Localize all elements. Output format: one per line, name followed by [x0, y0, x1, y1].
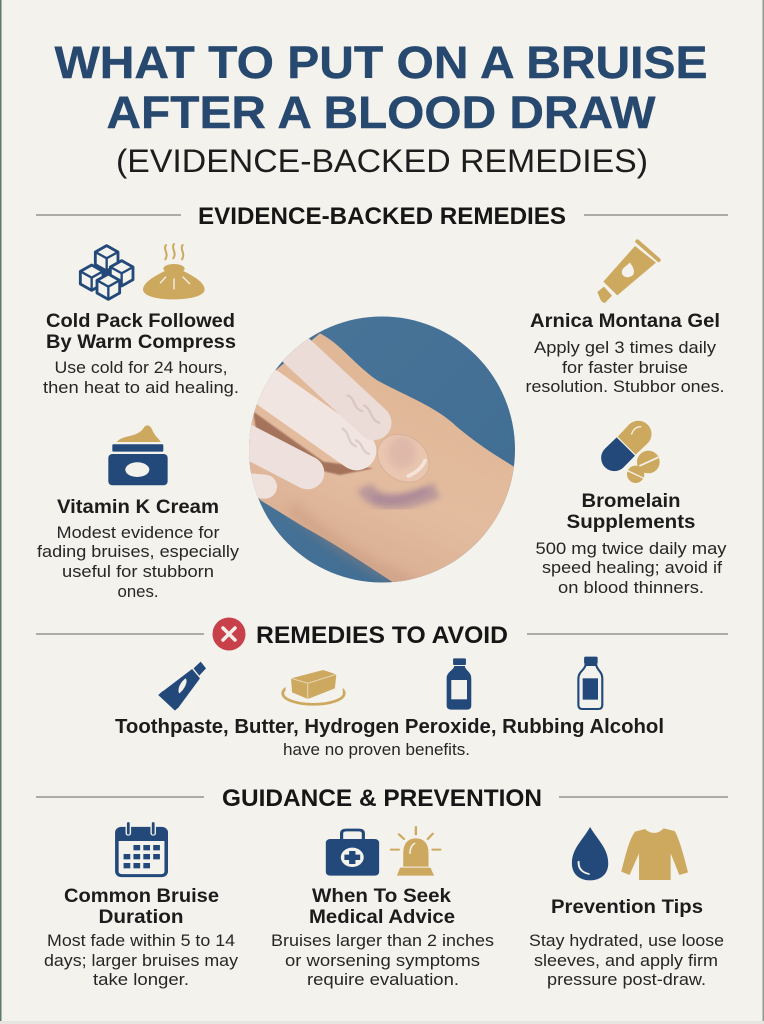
text: prevention tips: Prevention Tips: [551, 897, 703, 918]
photo: gloved fingers pressing a bandage on a bruised arm: [249, 316, 515, 582]
text: arnica montana gel: Arnica Montana Gel: [530, 311, 720, 332]
text: vitamin k cream: Modest evidence for: [56, 523, 220, 542]
text: bromelain supplements: Bromelain: [582, 491, 680, 512]
text: common bruise duration: [44, 886, 239, 989]
icon: pills: [601, 421, 660, 483]
text: when to seek medical advice: or worsening symptoms: [285, 951, 480, 970]
text: bromelain supplements: speed healing; avoid if: [542, 558, 722, 577]
bandage: [377, 434, 430, 482]
text: common bruise duration: Most fade within 5 to 14: [47, 931, 235, 950]
title: WHAT TO PUT ON A BRUISE: [54, 37, 708, 88]
text: arnica montana gel: Apply gel 3 times daily: [534, 338, 717, 357]
text: vitamin k cream: Vitamin K Cream: [57, 497, 219, 518]
text: arnica montana gel: resolution. Stubbor ones.: [526, 377, 724, 396]
title: AFTER A BLOOD DRAW: [106, 87, 656, 138]
title: (EVIDENCE-BACKED REMEDIES): [116, 143, 648, 179]
text: when to seek medical advice: Medical Advice: [309, 907, 455, 928]
text: arnica montana gel: for faster bruise: [562, 358, 688, 377]
text: cold pack followed by warm compress: Cold Pack Followed: [46, 311, 235, 332]
text: cold pack followed by warm compress: Use cold for 24 hours,: [54, 358, 228, 377]
text: when to seek medical advice: When To Seek: [312, 886, 451, 907]
text: common bruise duration: days; larger bruises may: [44, 951, 239, 970]
text: vitamin k cream: fading bruises, especially: [37, 542, 240, 561]
text: prevention tips: [529, 897, 724, 989]
bruise: [365, 487, 437, 502]
icon: calendar: [116, 823, 167, 876]
text: prevention tips: pressure post-draw.: [547, 970, 706, 989]
text: vitamin k cream: ones.: [118, 582, 158, 601]
icon: water drop: [572, 827, 608, 880]
heading: guidance and prevention: GUIDANCE & PREVENTION: [222, 785, 542, 812]
text: vitamin k cream: [37, 497, 240, 601]
text: vitamin k cream: useful for stubborn: [62, 562, 214, 581]
text: cold pack followed by warm compress: [43, 311, 239, 397]
icon: toothpaste tube: [158, 662, 206, 711]
text: common bruise duration: take longer.: [93, 970, 189, 989]
text: bromelain supplements: [536, 491, 727, 597]
text: remedies to avoid list: have no proven benefits.: [283, 740, 470, 759]
heading: remedies to avoid: REMEDIES TO AVOID: [256, 622, 508, 649]
icon: alarm siren: [391, 827, 440, 876]
text: common bruise duration: Common Bruise: [64, 886, 219, 907]
text: bromelain supplements: 500 mg twice daily may: [536, 539, 727, 558]
text: prevention tips: Stay hydrated, use loose: [529, 931, 724, 950]
icon: hydrogen peroxide bottle: [447, 658, 471, 710]
text: bromelain supplements: on blood thinners.: [558, 578, 704, 597]
title: [54, 37, 708, 179]
text: common bruise duration: Duration: [98, 907, 184, 928]
text: prevention tips: sleeves, and apply firm: [534, 951, 718, 970]
icon: ice cubes: [80, 246, 133, 299]
text: when to seek medical advice: require evaluation.: [307, 970, 459, 989]
icon: arnica gel tube: [597, 241, 659, 303]
text: when to seek medical advice: [271, 886, 494, 989]
icon: medical bag: [326, 830, 379, 876]
icon: butter on a plate: [283, 670, 344, 704]
text: cold pack followed by warm compress: By Warm Compress: [46, 332, 236, 353]
icon: long-sleeve shirt: [621, 828, 688, 880]
text: arnica montana gel: [526, 311, 724, 396]
text: when to seek medical advice: Bruises larger than 2 inches: [271, 931, 494, 950]
icon: cream jar: [108, 425, 168, 485]
text: remedies to avoid list: Toothpaste, Butter, Hydrogen Peroxide, Rubbing Alcohol: [115, 716, 664, 738]
text: remedies to avoid list: [115, 716, 664, 759]
fingers: [247, 485, 265, 487]
text: cold pack followed by warm compress: then heat to aid healing.: [43, 378, 239, 397]
icon: warm compress: [143, 244, 205, 299]
text: bromelain supplements: Supplements: [566, 512, 696, 533]
icon: red x: [212, 618, 246, 650]
icon: rubbing alcohol bottle: [578, 657, 602, 709]
heading: evidence-backed remedies: EVIDENCE-BACKED REMEDIES: [198, 203, 566, 230]
